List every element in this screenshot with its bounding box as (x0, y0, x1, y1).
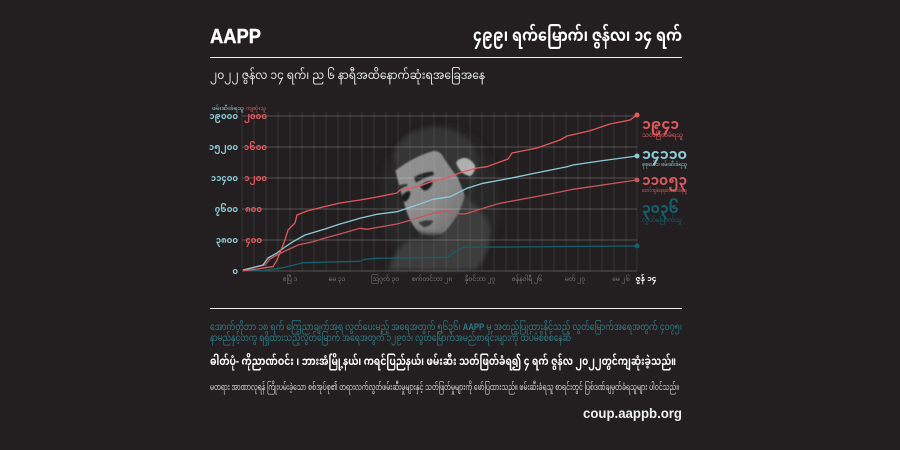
x axis labels: စက်တင်ဘာ ၂၈ (412, 275, 452, 284)
panel: line chart with portrait (209, 104, 687, 284)
x axis labels: ဧပြီ ၁ (283, 275, 298, 284)
value: released: လွတ်မြောက်သူ (642, 214, 682, 226)
series: released (teal) (243, 244, 640, 271)
x axis labels: မေ ၂၆ (612, 275, 631, 284)
text block: featured person (bold white): ဓါတ်ပုံ- ကိုညာဏ်ဝင်း ၊ ဘားအံမြို့နယ်၊ ကရင်ပြည်နယ်၊ ဖမ်းဆီး သတ်ဖြတ်ခံရ၍ ၄ ရက် ဇွန်လ ၂၀၂၂တွင်ကျဆုံးခဲ့သည်။ (210, 351, 676, 372)
text block: release note (teal) (210, 320, 682, 346)
x axis labels (283, 275, 631, 284)
website link: coup.aappb.org (583, 405, 682, 421)
right y axis labels: ၁၂၀၀ (244, 173, 267, 185)
right y axis labels: ၄၀၀ (245, 235, 262, 247)
right y axis labels: ၂၀၀၀ (244, 111, 267, 123)
value: released (642, 199, 682, 226)
series: still detained (red, lower) (243, 178, 640, 270)
text block: methodology note: မတရား အာဏာလုရန် ကြိုးပမ်းခဲ့သော စစ်အုပ်စု၏ တရားလက်လွတ်ဖမ်းဆီးမှုများနှင့် သတ်ဖြတ်မှုများကို ဖော်ပြထားသည်။ ဖမ်းဆီးခံရသူ စာရင်းတွင် ပြစ်ဒဏ်ချမှတ်ခံရသူများ ပါဝင်သည်။ (210, 380, 679, 395)
value: released: ၃၀၃၆ (642, 199, 679, 220)
left y axis labels: ၁၉၀၀၀ (209, 111, 238, 123)
x axis labels: ဇန်နဝါရီ ၂၆ (512, 275, 543, 284)
subtitle: last updated: ၂၀၂၂ ဇွန်လ ၁၄ ရက်၊ ည ၆ နာရီအထိနောက်ဆုံးရအခြေအနေ (210, 68, 485, 84)
left y axis labels: ၁၅၂၀၀ (209, 142, 238, 154)
text block: release note (teal): အောက်တိုဘာ ၁၈ ရက် ကြေညာချက်အရ လွတ်ပေးမည့် အရေအတွက် ၅၆၃၆၊ AAPP မှ အတည်ပြုထားနိုင်သည့် လွတ်မြောက်အရေအတွက် ၄၀၇၅၊ (210, 320, 682, 335)
series: detained (light blue) (243, 154, 640, 270)
left y axis labels: ၀ (232, 266, 238, 276)
left y axis labels: ၇၆၀၀ (215, 203, 238, 216)
x axis labels: နိုဝင်ဘာ ၂၇ (465, 275, 496, 284)
value: detained (642, 146, 687, 169)
value: killed: သတ်ဖြတ်ခံရသူ (642, 129, 683, 141)
value: still detained (642, 172, 687, 195)
value: killed (642, 116, 683, 141)
text block: release note (teal): နာမည်နှင့်တကွ ရရှိထားသည့်လွတ်မြောက် အရေအတွက် ၁၂၉၀၁၊ လွတ်မြောက်အမည်စာရင်းများကို ထပ်မံစိစစ်နေဆဲ (210, 331, 571, 346)
portrait photo (382, 127, 498, 272)
left y axis labels (209, 111, 238, 276)
x axis labels: ဩဂုတ် ၃၀ (371, 275, 399, 284)
right y axis labels: ၁၆၀၀ (244, 141, 267, 152)
y axis titles: ဖမ်းဆီးခံရသူ (212, 104, 244, 113)
y axis titles (212, 104, 266, 113)
value: detained: ၁၄၁၁၀ (642, 146, 687, 166)
value: still detained: ၁၁၀၅၃ (642, 172, 687, 192)
x axis labels: မတ် ၂၇ (565, 275, 585, 284)
right y axis labels: ၈၀၀ (245, 204, 262, 214)
left y axis labels: ၁၁၄၀၀ (211, 173, 238, 185)
series: killed (red, upper) (243, 112, 640, 271)
y axis titles: ကျဆုံးသူ (246, 105, 266, 113)
left y axis labels: ၃၈၀၀ (216, 235, 238, 247)
value: killed: ၁၉၄၁ (642, 116, 679, 136)
x axis labels: မေ ၃၁ (329, 277, 346, 284)
value: detained: စုစုပေါင်း ဖမ်းဆီးခံရသူ (642, 160, 687, 169)
heading: day count and date: ၄၉၉၊ ရက်မြောက်၊ ဇွန်လ၊ ၁၄ ရက် (473, 23, 682, 49)
x axis end label: 14 June: ဇွန် ၁၄ (636, 274, 657, 284)
value: still detained: ထောင်ကျခံနေရဆဲဖမ်းဆီးခံရသူ (642, 186, 687, 195)
logo: AAPP: AAPP (210, 26, 261, 48)
right y axis labels (244, 111, 267, 247)
grid lines (242, 112, 637, 271)
